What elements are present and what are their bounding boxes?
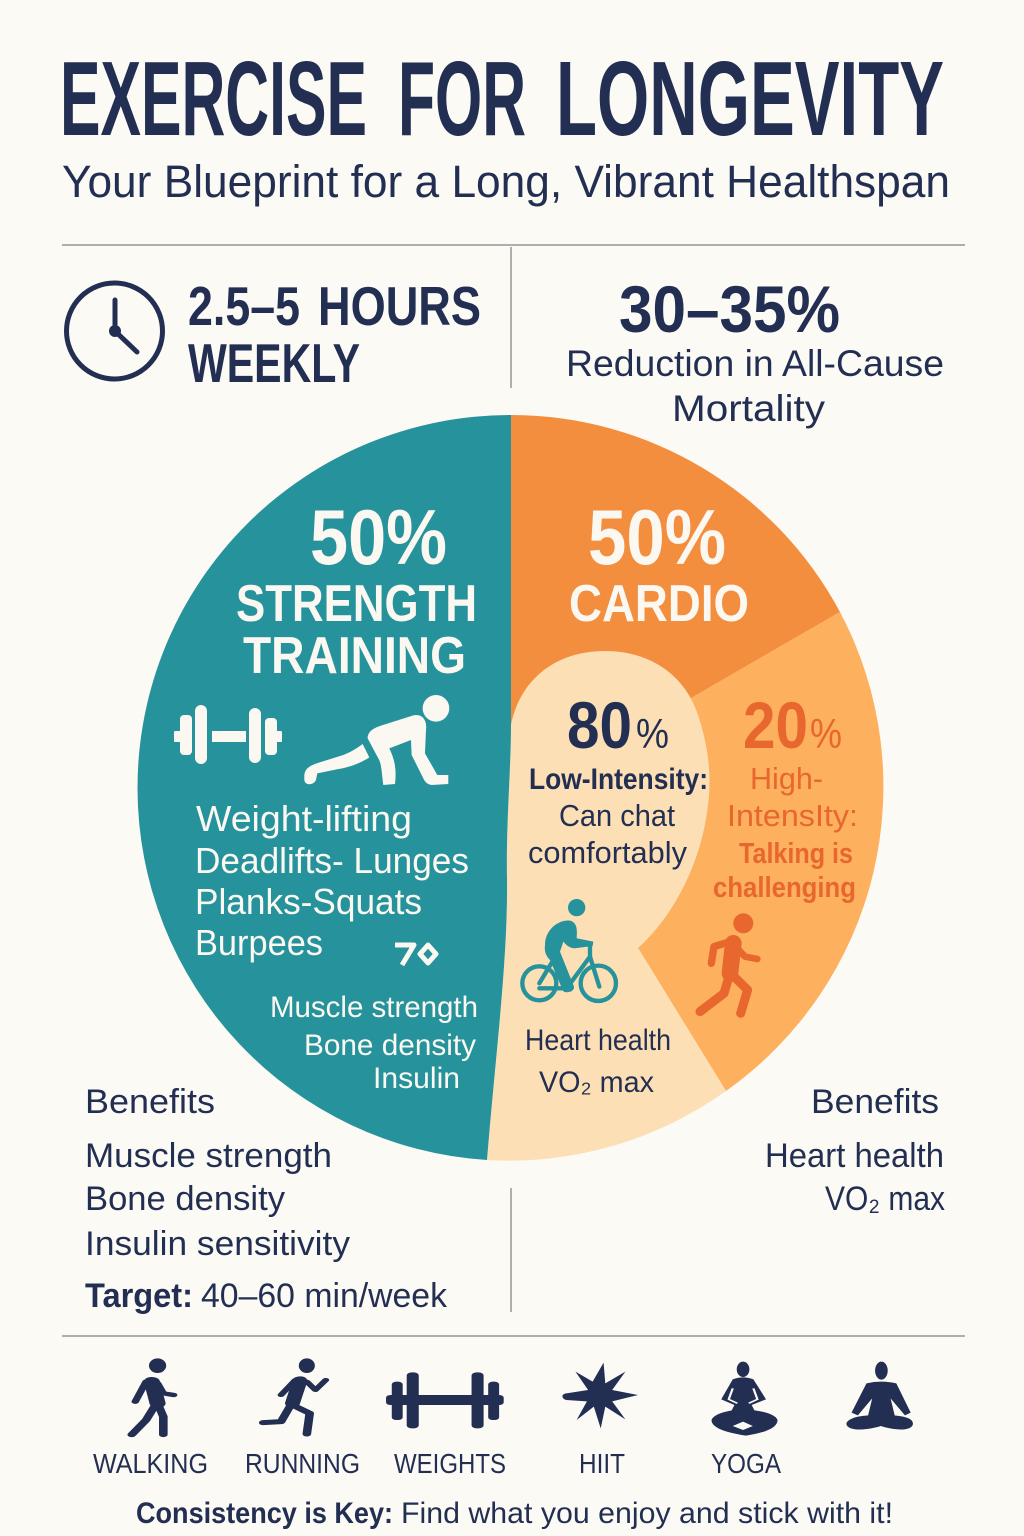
strength benefits list: Muscle strength: [85, 1137, 332, 1175]
cardio benefits in pie: Heart health: [525, 1024, 671, 1057]
panel: activity icons: [93, 1358, 913, 1479]
icon: running: [263, 1358, 326, 1434]
icon: small glyph mark: [395, 945, 436, 965]
footer message: Consistency is Key:: [136, 1497, 393, 1530]
strength benefits in pie: [270, 991, 478, 1095]
cardio heading: CARDIO: [569, 575, 749, 633]
pie segment: low intensity: [487, 651, 726, 1161]
weekly hours text: 2.5–5: [188, 275, 300, 337]
cardio benefits in pie: [525, 1024, 671, 1099]
activity labels: [93, 1448, 781, 1479]
cardio benefits heading: Benefits: [811, 1083, 939, 1121]
activity labels: YOGA: [711, 1448, 781, 1479]
mortality description: [566, 343, 944, 429]
panel: cardio benefits: [765, 1083, 945, 1218]
activity labels: RUNNING: [245, 1448, 360, 1479]
title: FOR: [398, 40, 526, 158]
activity labels: WALKING: [93, 1448, 208, 1479]
cardio benefits list: VO₂ max: [825, 1180, 945, 1218]
chart: exercise split pie: [138, 415, 883, 1161]
activity labels: WEIGHTS: [394, 1448, 506, 1479]
title: EXERCISE: [60, 40, 367, 158]
strength exercises list: Deadlifts- Lunges: [195, 840, 469, 881]
high intensity text: IntensIty:: [727, 798, 858, 833]
strength heading: [236, 493, 477, 685]
strength exercises list: Burpees: [195, 922, 323, 963]
icon: weights: [386, 1372, 504, 1428]
strength benefits in pie: Muscle strength: [270, 991, 478, 1024]
title: [60, 40, 944, 158]
weekly hours text: HOURS: [318, 275, 481, 337]
icon: yoga pose two: [846, 1362, 913, 1429]
icon: HIIT burst: [562, 1363, 638, 1428]
strength benefits in pie: Insulin: [373, 1062, 460, 1095]
mortality description: Reduction in All-Cause: [566, 343, 944, 384]
activity labels: HIIT: [579, 1448, 625, 1479]
strength heading: 50%: [310, 493, 447, 581]
icon: cyclist: [522, 899, 616, 1001]
cardio heading: [569, 493, 749, 633]
low intensity text: 80: [567, 688, 632, 762]
weekly hours text: [188, 275, 481, 337]
high intensity text: challenging: [713, 872, 856, 904]
cardio benefits list: [765, 1137, 945, 1218]
low intensity text: %: [636, 710, 669, 757]
strength target: Target:: [85, 1277, 193, 1315]
panel: weekly hours: [66, 275, 481, 394]
icon: runner orange: [700, 913, 757, 1013]
icon: push-up figure: [304, 695, 449, 785]
strength heading: TRAINING: [243, 627, 466, 685]
strength exercises list: Planks-Squats: [195, 881, 422, 922]
footer message: Find what you enjoy and stick with it!: [401, 1497, 893, 1530]
strength benefits list: Insulin sensitivity: [85, 1225, 350, 1263]
subtitle: Your Blueprint for a Long, Vibrant Healthspan: [62, 156, 950, 207]
strength benefits in pie: Bone density: [304, 1029, 476, 1062]
icon: yoga pose one: [711, 1362, 778, 1436]
icon: walking: [132, 1358, 174, 1435]
high intensity text: %: [810, 710, 842, 757]
low intensity text: comfortably: [528, 835, 687, 870]
strength benefits list: [85, 1137, 350, 1263]
cardio benefits list: Heart health: [765, 1137, 944, 1175]
panel: mortality reduction: [566, 272, 944, 429]
weekly label: WEEKLY: [188, 332, 360, 394]
cardio benefits in pie: VO₂ max: [539, 1066, 654, 1099]
mortality figure: 30–35%: [619, 272, 840, 346]
low intensity text: [528, 688, 708, 870]
strength benefits list: Bone density: [85, 1180, 285, 1218]
strength target: [85, 1277, 448, 1315]
high intensity text: Talking is: [739, 838, 853, 870]
icon: clock: [66, 283, 162, 379]
low intensity text: Can chat: [559, 798, 675, 833]
pie segment: strength training: [138, 415, 511, 1160]
strength exercises list: Weight-lifting: [196, 798, 412, 839]
pie segment: high intensity: [610, 612, 883, 1091]
strength exercises list: [195, 798, 469, 963]
high intensity text: High-: [750, 761, 823, 796]
icon: barbell white: [174, 705, 282, 764]
cardio heading: 50%: [588, 493, 726, 581]
strength heading: STRENGTH: [236, 575, 477, 633]
pie segment: cardio base: [511, 415, 840, 760]
mortality description: Mortality: [672, 388, 826, 429]
high intensity text: [713, 688, 858, 904]
strength target: 40–60 min/week: [201, 1277, 448, 1315]
panel: strength benefits: [85, 1083, 448, 1315]
strength benefits heading: Benefits: [85, 1083, 215, 1121]
high intensity text: 20: [743, 688, 808, 762]
low intensity text: Low-Intensity:: [529, 763, 708, 796]
footer message: [136, 1497, 893, 1530]
